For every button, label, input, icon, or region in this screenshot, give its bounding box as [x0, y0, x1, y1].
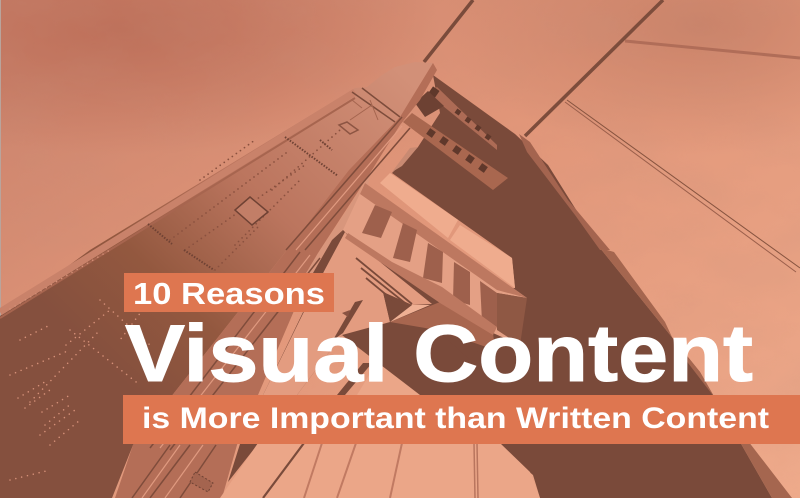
lower block with stripes and arrow — [263, 230, 535, 395]
diagonal windowed panel — [343, 183, 527, 345]
main title: Visual Content — [125, 309, 753, 399]
hatch plates — [148, 137, 338, 270]
bottom rivet plate — [190, 472, 213, 492]
panel windows — [362, 205, 497, 327]
square hatch — [235, 197, 268, 225]
subtitle banner — [123, 395, 800, 444]
heading label: 10 Reasons: 10 Reasons — [133, 276, 325, 311]
lower cables over sky — [263, 443, 478, 498]
dark wedge by lower strip — [228, 444, 258, 482]
vertical light strip — [115, 63, 437, 498]
subtitle banner: is More Important than Written Content — [142, 402, 769, 435]
tower top cap — [352, 88, 400, 122]
left tower face — [0, 62, 433, 498]
main tower dark body — [377, 75, 792, 498]
suspension cables — [424, 0, 800, 272]
upper tower rows of windows — [392, 86, 508, 190]
rivet lines — [10, 250, 150, 480]
sky gap between beams — [380, 173, 515, 288]
sky below the bar — [220, 443, 540, 498]
